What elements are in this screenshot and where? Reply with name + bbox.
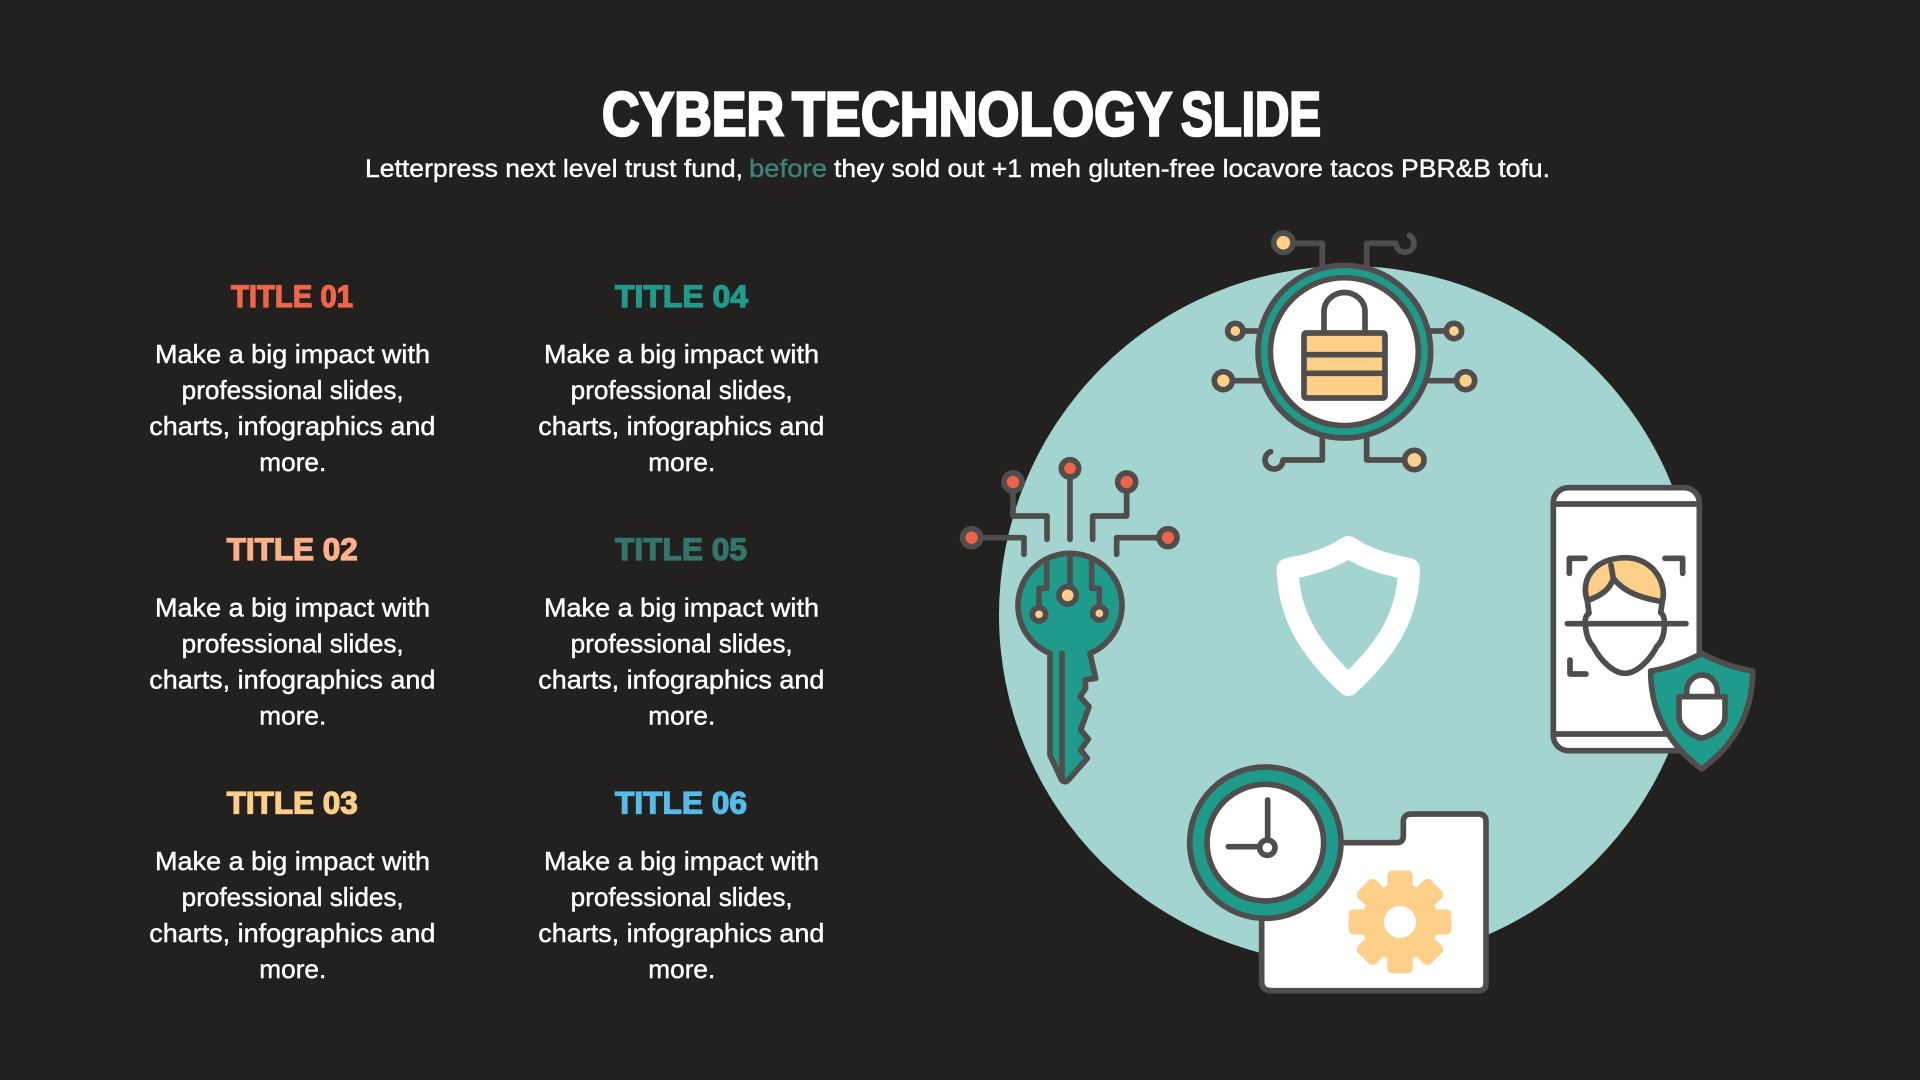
icon: phone face scan: [1553, 488, 1753, 769]
text block: title 06: Make a big impact with: [544, 846, 819, 876]
text block: title 03: professional slides,: [182, 882, 404, 912]
icon: clock: [1190, 767, 1341, 918]
text block: title 06: professional slides,: [571, 882, 793, 912]
text block: title 03: charts, infographics and: [149, 918, 435, 948]
text block: title 02: Make a big impact with: [155, 592, 430, 622]
text block: title 05: professional slides,: [571, 628, 793, 658]
title: [602, 80, 1321, 150]
title: SLIDE: [1181, 80, 1321, 150]
icon: folder with gear: [1262, 814, 1486, 991]
text block: title 06: TITLE 06: [615, 785, 747, 821]
text block: title 05: [538, 531, 824, 730]
subtitle: Letterpress next level trust fund,: [365, 155, 743, 183]
icon: circuit key: [963, 460, 1177, 782]
text block: title 02: professional slides,: [182, 628, 404, 658]
subtitle: they sold out +1 meh gluten-free locavore tacos PBR&B tofu.: [834, 155, 1550, 183]
text block: title 05: charts, infographics and: [538, 664, 824, 694]
icon: padlock circuit: [1214, 233, 1475, 470]
text block: title 06: charts, infographics and: [538, 918, 824, 948]
text block: title 02: [149, 531, 435, 730]
text block: title 01: TITLE 01: [231, 278, 353, 314]
text block: title 04: professional slides,: [571, 375, 793, 405]
text block: title 06: [538, 785, 824, 984]
text block: title 03: TITLE 03: [227, 785, 358, 821]
text block: title 01: charts, infographics and: [149, 411, 435, 441]
text block: title 02: TITLE 02: [227, 531, 358, 567]
title: CYBER: [602, 80, 784, 150]
text block: title 05: Make a big impact with: [544, 592, 819, 622]
icon: central shield: [1288, 547, 1409, 685]
text block: title 01: more.: [259, 447, 326, 477]
text block: title 04: Make a big impact with: [544, 339, 819, 369]
text block: title 01: [149, 278, 435, 477]
text block: title 06: more.: [648, 954, 715, 984]
text block: title 02: more.: [259, 700, 326, 730]
text block: title 05: more.: [648, 700, 715, 730]
text block: title 05: TITLE 05: [615, 531, 747, 567]
subtitle: [365, 155, 1550, 183]
text block: title 01: Make a big impact with: [155, 339, 430, 369]
text block: title 04: [538, 278, 824, 477]
text block: title 01: professional slides,: [182, 375, 404, 405]
title: TECHNOLOGY: [792, 80, 1172, 150]
text block: title 04: more.: [648, 447, 715, 477]
text block: title 03: Make a big impact with: [155, 846, 430, 876]
text block: title 04: charts, infographics and: [538, 411, 824, 441]
text block: title 03: more.: [259, 954, 326, 984]
text block: title 04: TITLE 04: [615, 278, 748, 314]
text block: title 03: [149, 785, 435, 984]
background circle: [999, 266, 1697, 964]
text block: title 02: charts, infographics and: [149, 664, 435, 694]
subtitle: before: [749, 155, 827, 183]
